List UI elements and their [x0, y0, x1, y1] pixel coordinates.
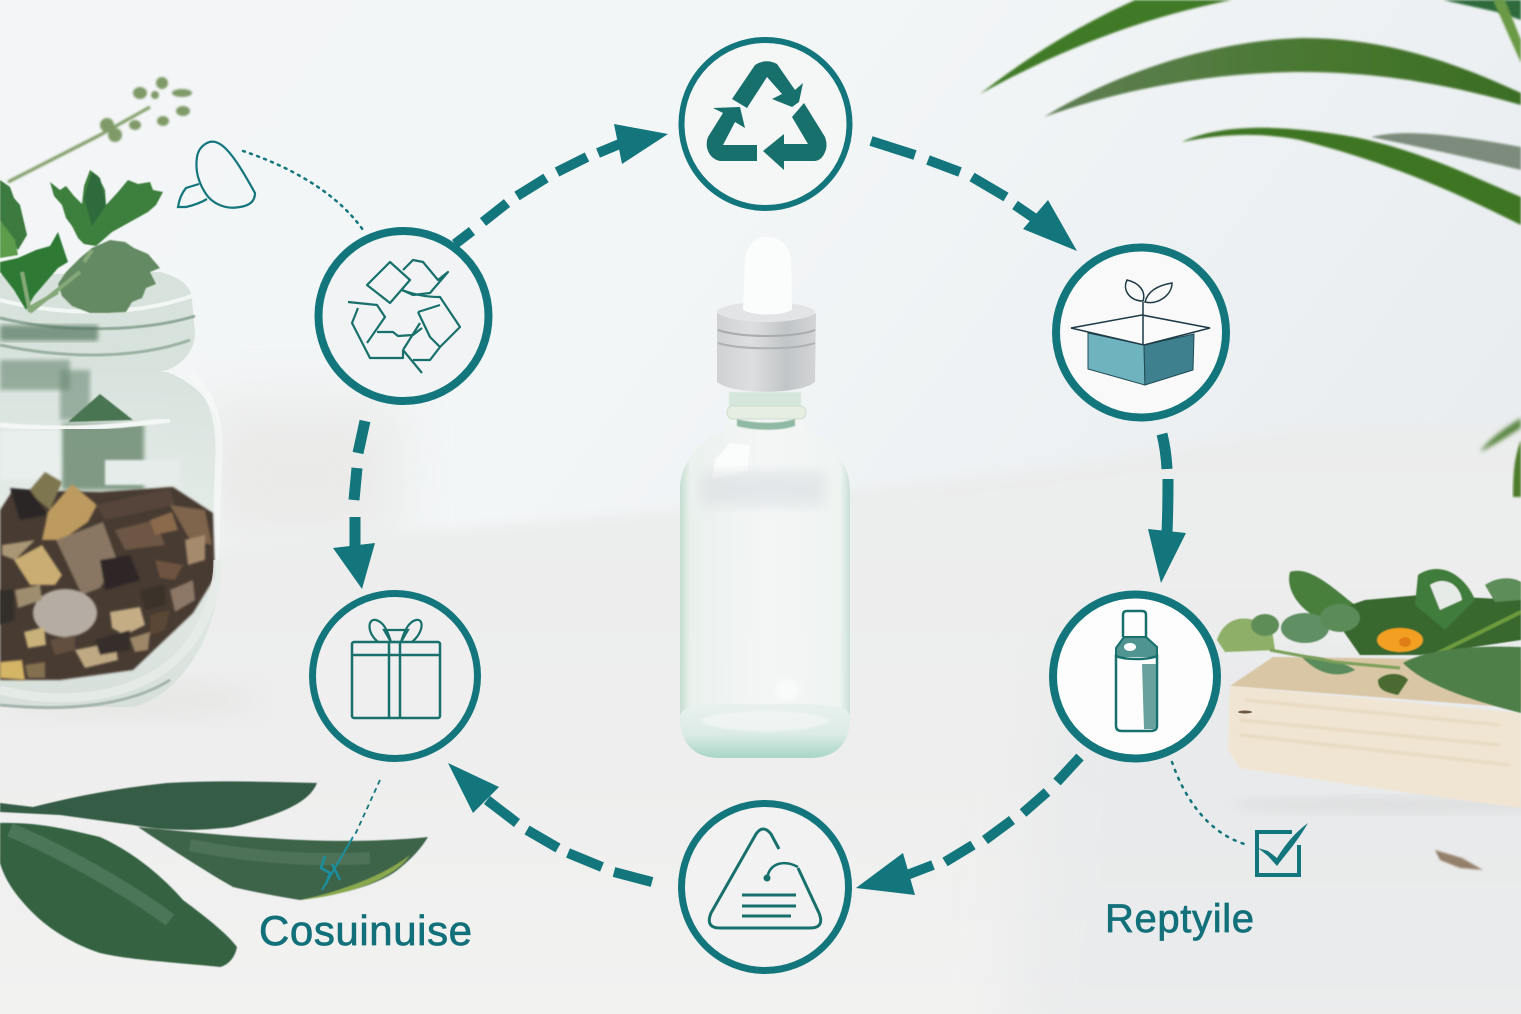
label: Cosuinuise: Cosuinuise — [259, 907, 472, 954]
background: wall shade near jar — [200, 400, 400, 550]
callout: lower left dashed connector with marker — [321, 780, 380, 890]
glass jar with soil and rocks — [0, 272, 260, 714]
callout: top left icon with dotted connector — [178, 142, 363, 230]
table shade on right — [1000, 640, 1521, 1014]
plant sprig top left — [8, 77, 192, 182]
dropper collar — [717, 302, 815, 322]
green leaves bottom left — [0, 781, 428, 967]
background plant: palm leaves top right — [980, 0, 1521, 497]
arrow: upper left to top — [455, 124, 668, 244]
arrow: top to upper right — [871, 141, 1077, 251]
plant leaves in jar — [0, 170, 163, 313]
node: top recycling symbol — [682, 40, 850, 208]
dropper bulb — [743, 237, 792, 314]
arrow: upper right to lower right — [1148, 434, 1186, 583]
background: table surface — [0, 425, 1521, 1014]
node: upper right box with sprout — [1056, 248, 1226, 418]
wooden block with leaves — [1217, 569, 1521, 870]
arrow: lower right to bottom — [856, 757, 1080, 895]
jar reflection of leaf — [68, 394, 133, 422]
node: upper left outlined recycling symbol — [318, 231, 488, 401]
label: Reptyile: Reptyile — [1105, 897, 1254, 941]
node: lower right bottle — [1053, 594, 1217, 758]
node: bottom triangle label — [682, 804, 848, 970]
arrow: upper left to lower left — [333, 421, 375, 589]
arrow: bottom to lower left — [448, 763, 652, 882]
soil — [0, 487, 215, 680]
centre glass dropper bottle — [680, 237, 850, 758]
callout: lower right check box with dotted connector — [1172, 762, 1308, 875]
node: lower left gift box — [312, 594, 478, 758]
